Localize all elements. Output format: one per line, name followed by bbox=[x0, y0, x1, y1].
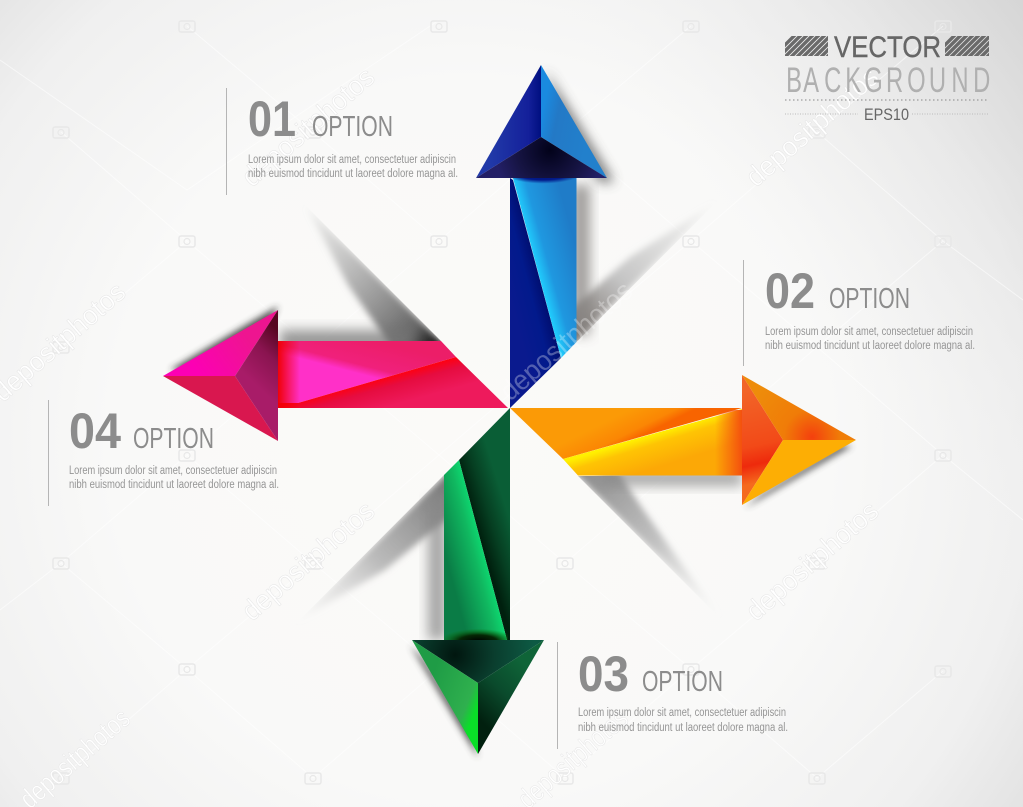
arrow: blue up bbox=[476, 65, 607, 408]
logo word background: BACKGROUND bbox=[786, 62, 990, 100]
shadow: blue head bbox=[545, 70, 614, 182]
shadow: bottom-left fold bbox=[318, 475, 444, 605]
blue shaft light fold bbox=[513, 178, 576, 358]
body copy: Lorem ipsum dolor sit amet, consectetuer adipiscin bbox=[765, 326, 973, 338]
shadow: pink shaft bbox=[280, 330, 415, 352]
green shaft base shade bbox=[444, 616, 508, 640]
shadow: orange head bbox=[745, 445, 852, 508]
watermark pattern: depositphotos bbox=[236, 495, 380, 627]
orange shaft upper fold bbox=[510, 408, 742, 459]
pink head lower facet bbox=[163, 376, 278, 441]
logo word vector: VECTOR bbox=[834, 31, 941, 64]
pink head upper facet bbox=[163, 310, 278, 376]
heading option: OPTION bbox=[312, 111, 393, 143]
heading option: OPTION bbox=[642, 666, 723, 698]
blue head right facet bbox=[541, 65, 607, 178]
shadow: green shaft bbox=[428, 500, 446, 640]
blue shaft top shade bbox=[510, 178, 576, 196]
shadow: top-right fold bbox=[576, 220, 694, 342]
arrow: orange right bbox=[510, 375, 856, 505]
body copy: nibh euismod tincidunt ut laoreet dolore magna al. bbox=[578, 722, 788, 734]
shadow: green head bbox=[410, 645, 478, 758]
green head top facet bbox=[412, 640, 544, 683]
body copy: Lorem ipsum dolor sit amet, consectetuer adipiscin bbox=[248, 154, 456, 166]
body copy: nibh euismod tincidunt ut laoreet dolore magna al. bbox=[765, 340, 975, 352]
green shaft dark fold bbox=[459, 408, 510, 640]
logo: vector background eps10 bbox=[785, 36, 990, 120]
pink shaft light fold bbox=[278, 341, 456, 404]
body copy: Lorem ipsum dolor sit amet, consectetuer adipiscin bbox=[69, 465, 277, 477]
watermark over arrows: depositphotos bbox=[494, 275, 638, 407]
shadow: pink head bbox=[170, 306, 278, 372]
heading option: OPTION bbox=[829, 283, 910, 315]
watermark pattern: depositphotos bbox=[236, 61, 380, 193]
green head right facet bbox=[478, 640, 544, 754]
shaft and head shadows bbox=[170, 70, 852, 758]
shadow: top-left fold bbox=[314, 218, 441, 341]
body copy bbox=[248, 154, 458, 180]
number 04: 04 bbox=[69, 403, 121, 459]
green head left facet bbox=[412, 640, 478, 754]
orange head upper facet bbox=[742, 375, 856, 440]
orange head lower facet bbox=[742, 440, 856, 505]
shadow: blue shaft bbox=[572, 185, 590, 335]
orange shaft lower fold bbox=[563, 409, 742, 476]
pink shaft dark fold bbox=[278, 357, 508, 408]
body copy bbox=[69, 465, 279, 491]
text block: option 01 bbox=[226, 88, 458, 195]
arrow: green down bbox=[412, 408, 544, 754]
body copy: Lorem ipsum dolor sit amet, consectetuer adipiscin bbox=[578, 707, 786, 719]
orange shaft right shade bbox=[715, 410, 742, 476]
diagonal fold shadows bbox=[296, 202, 720, 622]
pink head base facet bbox=[235, 310, 278, 441]
body copy: nibh euismod tincidunt ut laoreet dolore magna al. bbox=[248, 168, 458, 180]
text block: option 03 bbox=[557, 642, 788, 749]
watermark pattern: depositphotos bbox=[740, 61, 884, 193]
shadow: orange shaft bbox=[600, 470, 742, 486]
logo small rule right bbox=[912, 113, 989, 115]
number 02: 02 bbox=[765, 263, 815, 319]
body copy bbox=[578, 707, 788, 734]
arrow: pink left bbox=[163, 310, 508, 441]
pink shaft left shade bbox=[278, 341, 302, 408]
number 03: 03 bbox=[578, 646, 629, 702]
logo eps10: EPS10 bbox=[864, 105, 909, 124]
orange head base facet bbox=[742, 375, 783, 505]
blue shaft dark fold bbox=[510, 178, 561, 408]
logo stripes left bbox=[785, 36, 828, 56]
number 01: 01 bbox=[248, 91, 296, 147]
shadow: bottom-right fold bbox=[578, 476, 698, 592]
logo stripes right bbox=[945, 36, 989, 56]
logo dotted rule bbox=[785, 99, 989, 101]
text block: option 04 bbox=[48, 400, 279, 506]
blue head base facet bbox=[476, 137, 607, 178]
logo small rule left bbox=[785, 113, 858, 115]
text block: option 02 bbox=[743, 260, 975, 366]
green shaft light fold bbox=[444, 460, 507, 640]
blue head left facet bbox=[476, 65, 541, 178]
heading option: OPTION bbox=[133, 423, 214, 455]
body copy: nibh euismod tincidunt ut laoreet dolore magna al. bbox=[69, 479, 279, 491]
watermark pattern: depositphotos bbox=[740, 495, 884, 627]
body copy bbox=[765, 326, 975, 352]
